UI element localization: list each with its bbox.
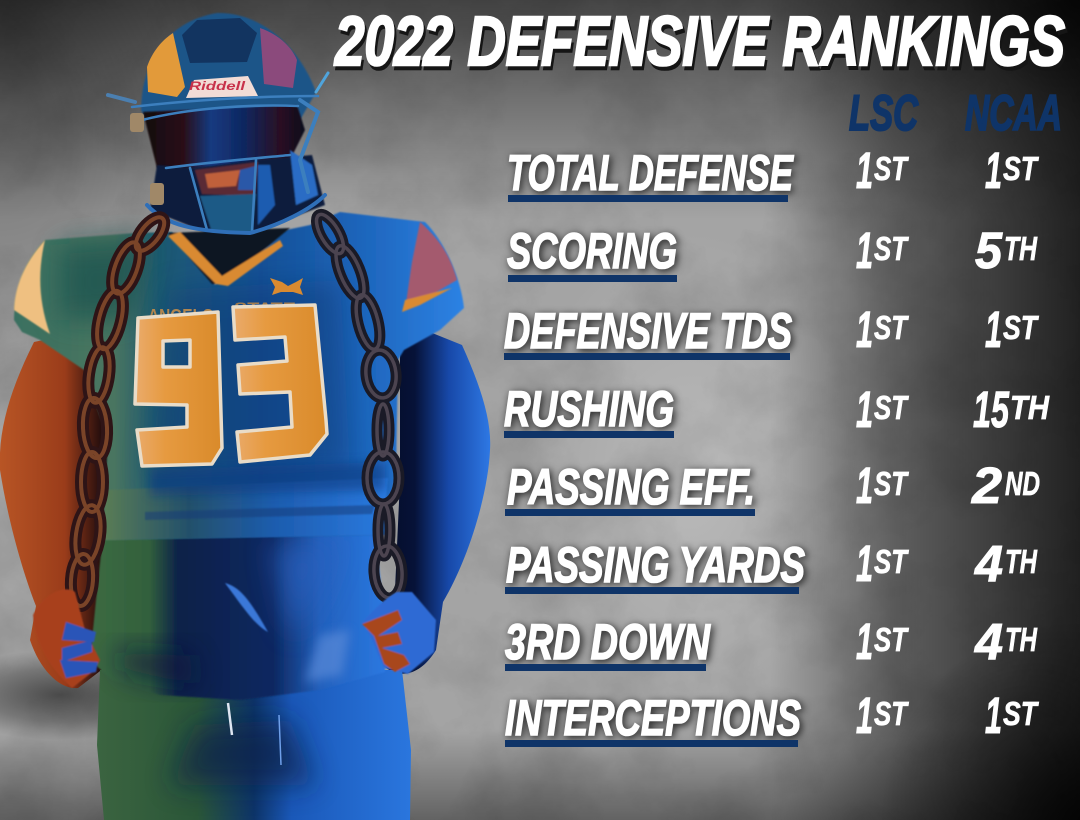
right chain <box>311 210 404 599</box>
row: scoring: 1 <box>856 222 873 279</box>
facemask bars <box>108 73 328 233</box>
row: passing yards: TH <box>1005 543 1038 580</box>
row: scoring <box>507 222 1038 282</box>
row: passing yards: PASSING YARDS <box>506 537 805 593</box>
pants shadow and drawstring <box>170 703 315 785</box>
jersey lettering and logo: ANGELO <box>148 306 214 326</box>
neck and collar <box>168 228 290 286</box>
row: defensive tds: ST <box>874 309 909 346</box>
row: passing efficiency: ND <box>1005 465 1040 502</box>
row: rushing <box>504 381 1050 438</box>
shoulder stripes <box>14 222 457 334</box>
helmet <box>108 13 328 233</box>
facemask clips <box>130 113 164 205</box>
undershirt fold highlights <box>115 540 350 685</box>
row: passing efficiency: 1 <box>856 457 873 514</box>
bumper with brand: Riddell <box>189 79 246 93</box>
row: scoring: SCORING <box>507 223 677 279</box>
right arm <box>360 320 490 674</box>
row: total defense: ST <box>1003 150 1039 187</box>
row: 3rd down: TH <box>1005 621 1038 658</box>
row: total defense: TOTAL DEFENSE <box>507 145 794 201</box>
row: passing efficiency <box>505 457 1040 516</box>
jersey shading <box>60 238 350 480</box>
row: scoring: TH <box>1004 230 1038 267</box>
row: passing efficiency: ST <box>874 465 909 502</box>
shell <box>141 13 316 125</box>
row: total defense: 1 <box>856 142 873 199</box>
row: scoring: 5 <box>975 222 1003 279</box>
row: interceptions: 1 <box>856 687 873 744</box>
right stripe <box>260 28 297 88</box>
waist band <box>103 462 388 540</box>
row: total defense: ST <box>874 150 909 187</box>
row: passing yards: ST <box>874 543 909 580</box>
row: passing efficiency: 2 <box>971 457 1002 514</box>
left chain <box>69 213 169 607</box>
row: passing yards: 4 <box>974 535 1003 592</box>
jersey number 93 <box>135 305 327 466</box>
row: passing efficiency: PASSING EFF. <box>507 459 755 515</box>
row: total defense: 1 <box>985 142 1002 199</box>
row: interceptions: INTERCEPTIONS <box>505 690 801 746</box>
row: interceptions: ST <box>1003 695 1039 732</box>
undershirt <box>90 530 385 700</box>
jersey <box>14 212 464 540</box>
row: 3rd down: 4 <box>974 613 1003 670</box>
row: interceptions: ST <box>874 695 909 732</box>
row: 3rd down <box>505 613 1038 671</box>
column header: LSC: LSC <box>849 85 919 141</box>
jersey lettering and logo <box>148 278 303 326</box>
row: defensive tds: 1 <box>856 301 873 358</box>
row: passing yards: 1 <box>856 535 873 592</box>
left arm <box>0 330 130 688</box>
crown hexagon <box>182 18 257 63</box>
row: defensive tds: 1 <box>985 301 1002 358</box>
row: interceptions: 1 <box>985 687 1002 744</box>
row: defensive tds: ST <box>1003 309 1039 346</box>
row: 3rd down: 1 <box>856 613 873 670</box>
row: rushing: 1 <box>856 381 873 438</box>
face and chin guard <box>150 150 325 232</box>
row: rushing: 15 <box>973 381 1009 438</box>
visor <box>143 105 305 170</box>
hands <box>33 589 436 688</box>
row: scoring: ST <box>874 230 909 267</box>
row: defensive tds: DEFENSIVE TDS <box>504 303 792 359</box>
row: rushing: RUSHING <box>504 381 674 437</box>
pants <box>97 670 411 820</box>
bumper with brand <box>186 76 258 98</box>
jersey lettering and logo: STATE <box>234 299 296 315</box>
row: 3rd down: ST <box>874 621 909 658</box>
row: 3rd down: 3RD DOWN <box>505 614 711 670</box>
row: rushing: TH <box>1010 389 1050 426</box>
left orange stripe <box>147 33 185 97</box>
row: rushing: ST <box>874 389 909 426</box>
player photo illustration <box>0 13 490 820</box>
